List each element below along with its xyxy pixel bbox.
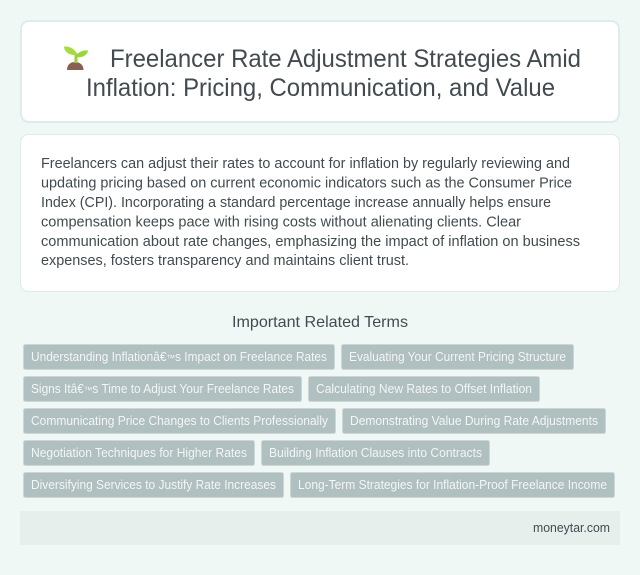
chip 3: Signs Itâ€™s Time to Adjust Your Freelance Rates (31, 382, 294, 396)
chip 7 (24, 440, 254, 466)
panel: title card (21, 21, 619, 122)
chip 4: Calculating New Rates to Offset Inflation (316, 382, 532, 396)
footer source text: moneytar.com (533, 521, 610, 535)
heading: important related terms: Important Related Terms (232, 314, 408, 331)
chip 5 (24, 408, 336, 434)
panel: description card (20, 134, 620, 292)
panel: title card: Inflation: Pricing, Communication, and Value (86, 74, 555, 102)
chip 5: Communicating Price Changes to Clients Professionally (31, 414, 329, 428)
description text (41, 156, 580, 269)
description text: expenses, fosters transparency and maintains client trust. (41, 253, 409, 269)
chip 7: Negotiation Techniques for Higher Rates (31, 446, 247, 460)
chip 6: Demonstrating Value During Rate Adjustments (350, 414, 598, 428)
chip 8 (262, 440, 490, 466)
description text: communication about rate changes, emphasizing the impact of inflation on business (41, 234, 580, 250)
chip 1 (24, 344, 334, 370)
description text: Freelancers can adjust their rates to account for inflation by regularly reviewing and (41, 156, 570, 172)
chip 6 (342, 408, 606, 434)
chip 2 (342, 344, 574, 370)
chip 3 (24, 376, 302, 402)
chip 9: Diversifying Services to Justify Rate Increases (31, 478, 276, 492)
chip 4 (308, 376, 540, 402)
description text: compensation keeps pace with rising costs without alienating clients. Clear (41, 214, 521, 230)
chip 2: Evaluating Your Current Pricing Structure (349, 350, 566, 364)
chip 10: Long-Term Strategies for Inflation-Proof Freelance Income (298, 478, 607, 492)
term chips (24, 344, 614, 498)
chip 9 (24, 472, 284, 498)
chip 1: Understanding Inflationâ€™s Impact on Freelance Rates (31, 350, 327, 364)
icon: sprout (64, 46, 88, 70)
footer (20, 511, 620, 545)
description text: updating pricing based on current economic indicators such as the Consumer Price (41, 176, 572, 192)
description text: Index (CPI). Incorporating a standard percentage increase annually helps ensure (41, 195, 551, 211)
title text: Freelancer Rate Adjustment Strategies Amid (110, 45, 581, 73)
chip 8: Building Inflation Clauses into Contracts (269, 446, 482, 460)
chip 10 (290, 472, 614, 498)
